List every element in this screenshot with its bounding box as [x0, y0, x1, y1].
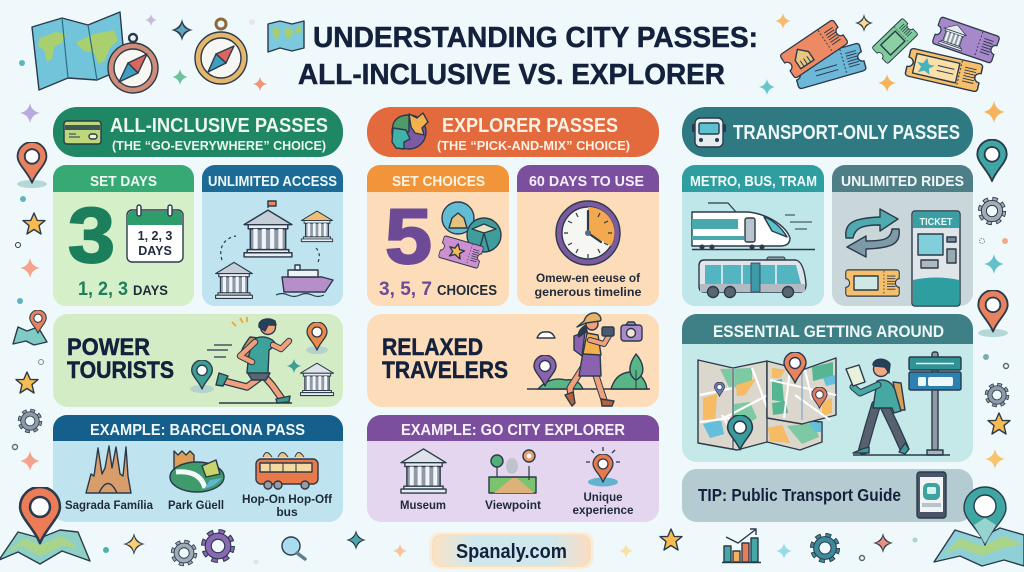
heading: essential getting around: ESSENTIAL GETTING AROUND [713, 323, 944, 341]
icon: gold museum [301, 211, 333, 242]
footer badge: spanaly.com: Spanaly.com [456, 541, 567, 563]
footer badge: spanaly.com [429, 532, 594, 569]
icon: teal pin [190, 360, 214, 393]
text: timeline caption [534, 271, 642, 299]
labels: barcelona attractions [65, 492, 333, 519]
text: power tourists [67, 334, 174, 384]
panel: essential getting around [682, 314, 973, 462]
panel: power tourists [53, 314, 343, 407]
panel: metro bus tram [682, 165, 824, 306]
heading: explorer passes: EXPLORER PASSES [442, 115, 618, 137]
icon: running tourist [207, 317, 292, 403]
panel: set choices [367, 165, 509, 306]
text: timeline caption: generous timeline [534, 285, 642, 299]
text: 1, 2, 3 days: DAYS [133, 283, 168, 298]
icon: city map [698, 358, 836, 450]
icon: camera [621, 322, 642, 341]
text: relaxed travelers [382, 334, 508, 384]
icon: walking man with map [846, 359, 909, 454]
icon: ticket machine: TICKET [920, 216, 953, 228]
icon: sparkle [287, 359, 301, 373]
text: relaxed travelers: TRAVELERS [382, 357, 508, 384]
icon: viewpoint [489, 450, 536, 493]
labels: barcelona attractions: bus [276, 505, 298, 519]
icon: calendar: 1, 2, 3 [138, 229, 172, 243]
icon: clock [556, 201, 620, 265]
panel: all-inclusive header [53, 107, 343, 157]
decorations: bottom right [776, 533, 918, 560]
decorations: right margin [977, 101, 1010, 469]
heading: metro bus tram: METRO, BUS, TRAM [690, 173, 817, 190]
icon: compass gold [195, 19, 247, 84]
text: 3, 5, 7 choices: CHOICES [437, 283, 497, 299]
icon: ground, cloud and trees [527, 332, 650, 389]
panel: relaxed travelers [367, 313, 659, 407]
icon: ticket [846, 270, 899, 296]
text: 1, 2, 3 days: 1, 2, 3 [78, 279, 128, 300]
icon: puzzle [392, 113, 428, 149]
decorations: bottom row [103, 529, 682, 564]
icon: sagrada familia [86, 446, 131, 493]
text: timeline caption: Omew-en eeuse of [536, 271, 641, 285]
text: power tourists: TOURISTS [67, 357, 174, 384]
labels: barcelona attractions: Hop-On Hop-Off [242, 492, 333, 506]
panel: set days [53, 165, 194, 306]
title: UNDERSTANDING CITY PASSES: [313, 22, 758, 54]
text: relaxed travelers: RELAXED [382, 334, 483, 361]
icon: tickets cluster [759, 13, 1000, 95]
labels: explorer attractions: Museum [400, 498, 446, 512]
labels: barcelona attractions: Sagrada Família [65, 498, 153, 512]
dashed route arrows [221, 236, 319, 262]
icon: orange pin [306, 322, 328, 354]
decorations: left margin [12, 103, 47, 471]
decoration: large pin on map right [934, 487, 1024, 566]
icon: main museum [244, 201, 292, 257]
icon: scattered sparkles top [19, 14, 267, 91]
icon: compass rose [108, 34, 158, 93]
icon: bus stop signpost [853, 352, 961, 455]
big number 3: 3 [68, 191, 115, 279]
icon: museum [300, 363, 334, 396]
icon: map pins [714, 352, 827, 450]
icon: purple pin [534, 355, 556, 386]
icon: title map [268, 21, 304, 52]
text: 3, 5, 7 choices: 3, 5, 7 [379, 279, 432, 300]
panel: tip [682, 469, 973, 522]
icon: bus [699, 257, 806, 298]
icon: woman photographer [565, 313, 614, 406]
panel: example go city explorer [367, 415, 659, 522]
heading: example go city: EXAMPLE: GO CITY EXPLORER [401, 422, 625, 439]
heading: set choices: SET CHOICES [392, 173, 485, 190]
panel: transport header [682, 107, 973, 157]
labels: explorer attractions: Unique [584, 490, 623, 504]
heading: transport-only passes: TRANSPORT-ONLY PASSES [733, 122, 960, 144]
heading: unlimited access: UNLIMITED ACCESS [208, 173, 337, 190]
panel: 60 days to use [517, 165, 659, 306]
icon: bus front [692, 118, 726, 147]
text: power tourists: POWER [67, 334, 150, 361]
icon: folded world map [32, 12, 125, 90]
heading: unlimited rides: UNLIMITED RIDES [841, 173, 964, 190]
big number 5: 5 [385, 192, 432, 280]
icon: grey museum [216, 262, 252, 298]
icon: museum [401, 449, 446, 493]
subheading: go-everywhere choice: (THE “GO-EVERYWHERE” CHOICE) [112, 138, 326, 153]
panel: explorer header [367, 107, 659, 157]
icon: ferry boat [276, 265, 333, 296]
panel: unlimited rides [832, 165, 973, 306]
icon: attraction badges and ticket [438, 202, 501, 268]
icon: bar chart with growth arrow [722, 529, 761, 562]
title: ALL-INCLUSIVE VS. EXPLORER [298, 59, 725, 91]
text: 3, 5, 7 choices [379, 279, 497, 300]
panel: unlimited access [202, 165, 343, 306]
decoration: large pin on map left [0, 487, 90, 564]
heading: 60 days to use: 60 DAYS TO USE [529, 173, 644, 190]
labels: explorer attractions [400, 490, 634, 517]
heading: all-inclusive passes: ALL-INCLUSIVE PASSES [110, 115, 328, 137]
panel: example barcelona pass [53, 415, 343, 522]
icon: calendar: DAYS [138, 244, 172, 258]
labels: barcelona attractions: Park Güell [168, 498, 224, 512]
subheading: pick-and-mix choice: (THE “PICK-AND-MIX” CHOICE) [437, 138, 630, 153]
icon: hop-on hop-off bus [256, 452, 318, 489]
icon: park guell [170, 451, 224, 492]
labels: explorer attractions: experience [572, 503, 634, 517]
icon: unique experience pin [586, 447, 620, 486]
icon: calendar [127, 205, 183, 262]
text: tip public transport guide: TIP: Public Transport Guide [698, 485, 901, 505]
icon: train [692, 203, 815, 250]
icon: credit card [64, 121, 101, 144]
labels: explorer attractions: Viewpoint [485, 498, 541, 512]
text: 1, 2, 3 days [78, 279, 168, 300]
icon: ticket machine [912, 211, 960, 306]
heading: example barcelona: EXAMPLE: BARCELONA PASS [90, 422, 305, 439]
title [298, 22, 758, 91]
icon: phone [917, 472, 946, 518]
icon: loop arrows [846, 209, 899, 257]
heading: set days: SET DAYS [90, 173, 157, 190]
